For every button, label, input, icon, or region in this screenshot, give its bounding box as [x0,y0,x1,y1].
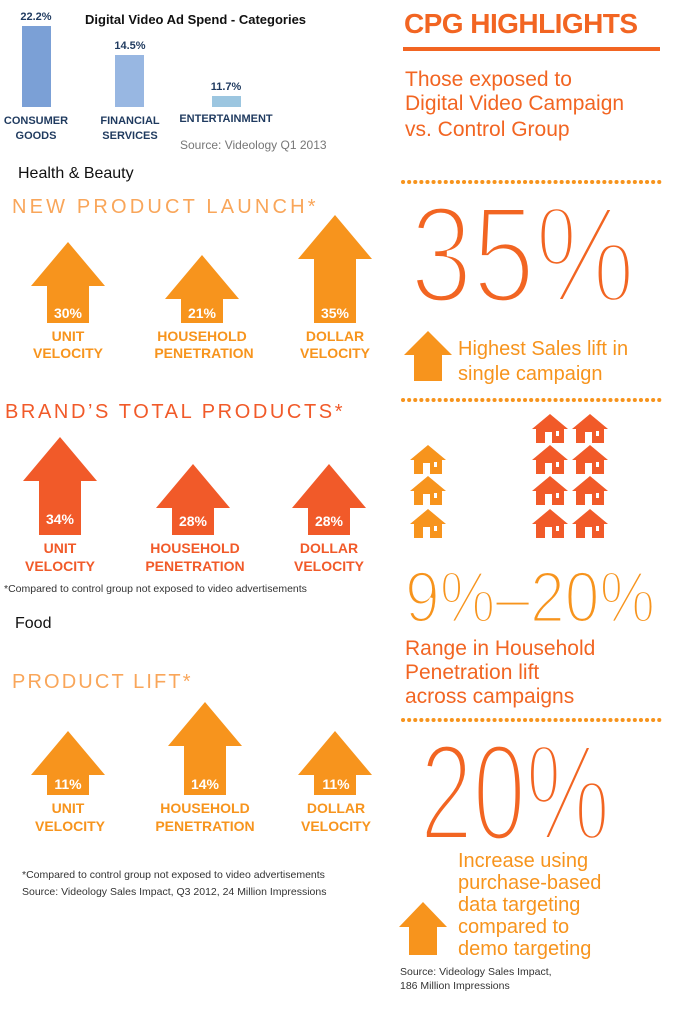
footnote and source: *Compared to control group not exposed to video advertisements [22,869,325,881]
text: increase using targeting: data targeting [458,894,580,916]
arrow: unit velocity 30%: VELOCITY [33,345,104,361]
big stat: 35%: 35% [410,178,635,332]
arrow: unit velocity 11%: 11% [54,776,82,792]
bar: financial services: SERVICES [102,130,158,142]
arrow: unit velocity 30% [31,242,105,361]
chart title: Digital Video Ad Spend - Categories [85,12,306,27]
arrow: unit velocity 30%: 30% [54,305,83,321]
intro text: Those exposed to [405,68,572,91]
heading: new product launch: NEW PRODUCT LAUNCH* [12,196,318,218]
arrow: household penetration 14% [155,702,255,834]
arrow: household penetration 21%: PENETRATION [154,345,254,361]
intro text: Digital Video Campaign [405,92,624,115]
bar: consumer goods: CONSUMER [4,115,68,127]
arrow: household penetration 21%: 21% [188,305,217,321]
source: 186 Million Impressions [400,980,510,992]
bar: financial services: FINANCIAL [100,115,160,127]
footnote: *Compared to control group not exposed to video advertisements [4,583,307,595]
bar: financial services: 14.5% [114,40,146,52]
footnote and source: Source: Videology Sales Impact, Q3 2012, 24 Million Impressions [22,886,326,898]
intro text [405,68,624,141]
text: increase using targeting: demo targeting [458,938,591,960]
footnote and source [22,869,326,898]
arrow: dollar velocity 35%: DOLLAR [306,328,364,344]
arrow: dollar velocity 35%: 35% [321,305,350,321]
text: increase using targeting: purchase-based [458,872,601,894]
text: increase using targeting [458,850,601,960]
bar: consumer goods: GOODS [16,130,56,142]
arrow: household penetration 28%: 28% [179,513,208,529]
arrow: unit velocity 34%: VELOCITY [25,558,96,574]
arrow: household penetration 28%: HOUSEHOLD [150,540,240,556]
bar: entertainment [179,81,273,125]
text: highest sales lift: Highest Sales lift in [458,338,628,360]
intro text: vs. Control Group [405,118,570,141]
heading: health & beauty: Health & Beauty [18,165,134,182]
bar: consumer goods [4,11,68,142]
heading: brand's total products: BRAND’S TOTAL PRODUCTS* [5,401,345,423]
big stat: 20%: 20% [420,716,610,870]
arrow: unit velocity 11%: UNIT [52,800,85,816]
bar chart: digital video ad spend [4,11,327,152]
arrow: dollar velocity 28% [292,464,366,574]
icons: 3 orange houses [410,445,446,538]
arrows: new product launch [31,215,372,361]
arrow: dollar velocity 28%: VELOCITY [294,558,365,574]
arrow: unit velocity 30%: UNIT [52,328,85,344]
text: household penetration range [405,637,595,708]
icon: small up arrow [404,331,452,381]
heading: cpg highlights: CPG HIGHLIGHTS [404,8,638,39]
big stat: 9%-20%: 9%–20% [405,558,655,638]
heading: product lift: PRODUCT LIFT* [12,671,193,693]
arrow: household penetration 21%: HOUSEHOLD [157,328,247,344]
bar: entertainment: ENTERTAINMENT [179,113,273,125]
source: Source: Videology Sales Impact, [400,966,552,978]
arrows: brand's total products [23,437,366,574]
arrow: household penetration 14%: PENETRATION [155,818,255,834]
arrow: unit velocity 34%: UNIT [44,540,77,556]
icons: 8 red houses [532,414,608,538]
arrow: dollar velocity 35%: VELOCITY [300,345,371,361]
arrow: household penetration 14%: HOUSEHOLD [160,800,250,816]
arrow: dollar velocity 11% [298,731,372,834]
arrow: household penetration 21% [154,255,254,361]
arrow: household penetration 28% [145,464,245,574]
arrow: unit velocity 11%: VELOCITY [35,818,106,834]
text: highest sales lift [458,338,628,385]
text: household penetration range: Range in Household [405,637,595,660]
arrow: unit velocity 34%: 34% [46,511,75,527]
arrow: dollar velocity 11%: VELOCITY [301,818,372,834]
bar: financial services [100,40,160,142]
arrow: household penetration 28%: PENETRATION [145,558,245,574]
arrow: unit velocity 34% [23,437,97,574]
text: increase using targeting: Increase using [458,850,588,872]
source [400,966,552,992]
arrow: dollar velocity 28%: 28% [315,513,344,529]
chart source: Source: Videology Q1 2013 [180,138,327,152]
arrow: dollar velocity 28%: DOLLAR [300,540,358,556]
text: increase using targeting: compared to [458,916,569,938]
bar: consumer goods: 22.2% [20,11,52,23]
arrow: household penetration 14%: 14% [191,776,220,792]
text: household penetration range: across campaigns [405,685,574,708]
arrow: dollar velocity 11%: DOLLAR [307,800,365,816]
arrow: dollar velocity 35% [298,215,372,361]
text: household penetration range: Penetration lift [405,661,539,684]
heading: food: Food [15,615,51,632]
bar: entertainment: 11.7% [211,81,242,93]
arrows: product lift [31,702,372,834]
arrow: dollar velocity 11%: 11% [322,776,350,792]
text: highest sales lift: single campaign [458,363,603,385]
arrow: unit velocity 11% [31,731,106,834]
icon: small up arrow [399,902,447,955]
